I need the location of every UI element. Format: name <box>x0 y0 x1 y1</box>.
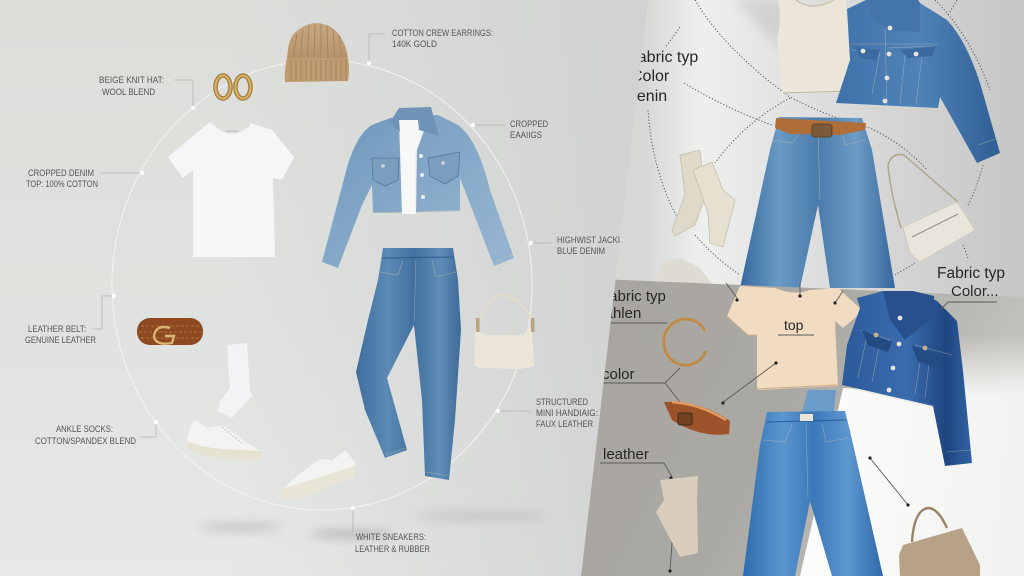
label: high-waist jacket: BLUE DENIM <box>557 246 605 256</box>
label: cotton crew earrings <box>392 28 493 49</box>
white inner tee <box>399 120 428 214</box>
cream socks <box>672 150 735 247</box>
blue mom jeans <box>356 248 461 480</box>
text: color (fragment): Color... <box>951 283 999 300</box>
label: structured mini handbag <box>536 397 598 429</box>
taupe handbag <box>899 508 980 576</box>
cream shoulder bag <box>888 154 975 262</box>
panel: main left layout <box>0 0 648 576</box>
label lines and text: leather <box>603 446 649 463</box>
text: color (fragment) <box>940 283 999 310</box>
label: cropped denim top: TOP: 100% COTTON <box>26 179 98 189</box>
label: top: top <box>784 317 804 333</box>
white sock <box>218 343 253 418</box>
label: beige knit hat: WOOL BLEND <box>102 87 155 97</box>
label: cotton crew earrings: 140K GOLD <box>392 39 437 49</box>
beige knit beanie <box>285 23 349 82</box>
light denim jacket <box>322 107 514 268</box>
label: ankle socks: COTTON/SPANDEX BLEND <box>35 436 136 446</box>
callout markers <box>92 34 551 533</box>
label: leather belt: GENUINE LEATHER <box>25 335 96 345</box>
blue garment behind <box>802 390 836 412</box>
label: beige knit hat: BEIGE KNIT HAT: <box>99 75 164 85</box>
label: cropped earrings <box>510 119 548 140</box>
label: cropped denim top: CROPPED DENIM <box>28 168 94 178</box>
braided leather belt <box>137 318 203 345</box>
label: white sneakers: LEATHER & RUBBER <box>355 544 430 554</box>
cream mini handbag <box>474 295 534 369</box>
tank top <box>777 0 852 94</box>
white sneaker <box>655 258 712 290</box>
label: ankle socks: ANKLE SOCKS: <box>56 424 113 434</box>
white light area <box>800 335 1024 576</box>
light-wash jeans with brown belt <box>740 117 895 288</box>
dotted callout arcs <box>648 0 990 275</box>
label: beige knit hat <box>99 75 164 97</box>
label lines and text <box>591 288 680 573</box>
text: fabric type, color, denim: Color <box>631 68 670 85</box>
floor shadows <box>198 510 545 538</box>
label: cropped earrings: CROPPED <box>510 119 548 129</box>
dark denim jacket <box>842 291 972 466</box>
white sneaker, right <box>282 450 355 499</box>
text: fabric type, color, denim: denin <box>628 88 667 105</box>
beige tee <box>727 286 863 390</box>
label: cotton crew earrings: COTTON CREW EARRINGS: <box>392 28 493 38</box>
white t-shirt <box>168 122 294 257</box>
gold hoop earrings <box>216 76 250 98</box>
text: fabric type: Fabric typ <box>937 265 1005 282</box>
blue jeans <box>743 411 883 576</box>
tan leather belt <box>664 402 730 435</box>
label: high-waist jacket: HIGHWIST JACKI <box>557 235 620 245</box>
label: cropped denim top <box>26 168 98 189</box>
label: structured mini handbag: MINI HANDIAIG: <box>536 408 598 418</box>
beige socks <box>656 476 698 557</box>
label: structured mini handbag: FAUX LEATHER <box>536 419 593 429</box>
label: leather belt <box>25 324 96 345</box>
label lines and text: color <box>602 366 635 383</box>
white sneaker, left <box>187 420 261 460</box>
dark denim jacket <box>836 0 1000 163</box>
label lines and text: Wahlen <box>591 305 641 322</box>
panel: top-right flat lay <box>610 0 1024 300</box>
panel: lower flat lay <box>570 279 1024 576</box>
label: white sneakers <box>355 532 430 554</box>
circular guide <box>112 60 532 510</box>
label: structured mini handbag: STRUCTURED <box>536 397 588 407</box>
label: leather belt: LEATHER BELT: <box>28 324 86 334</box>
label: ankle socks <box>35 424 136 446</box>
gold hoop earring <box>664 319 706 365</box>
text: fabric type, color, denim <box>628 49 698 105</box>
label lines and text: Fabric typ <box>600 288 666 305</box>
leader lines with dots <box>721 283 910 507</box>
label: high-waist jacket <box>557 235 620 256</box>
label: cropped earrings: EAAIIGS <box>510 130 542 140</box>
label: white sneakers: WHITE SNEAKERS: <box>356 532 426 542</box>
brown belt <box>775 118 866 135</box>
text: fabric type, color, denim: Fabric typ <box>628 49 698 66</box>
